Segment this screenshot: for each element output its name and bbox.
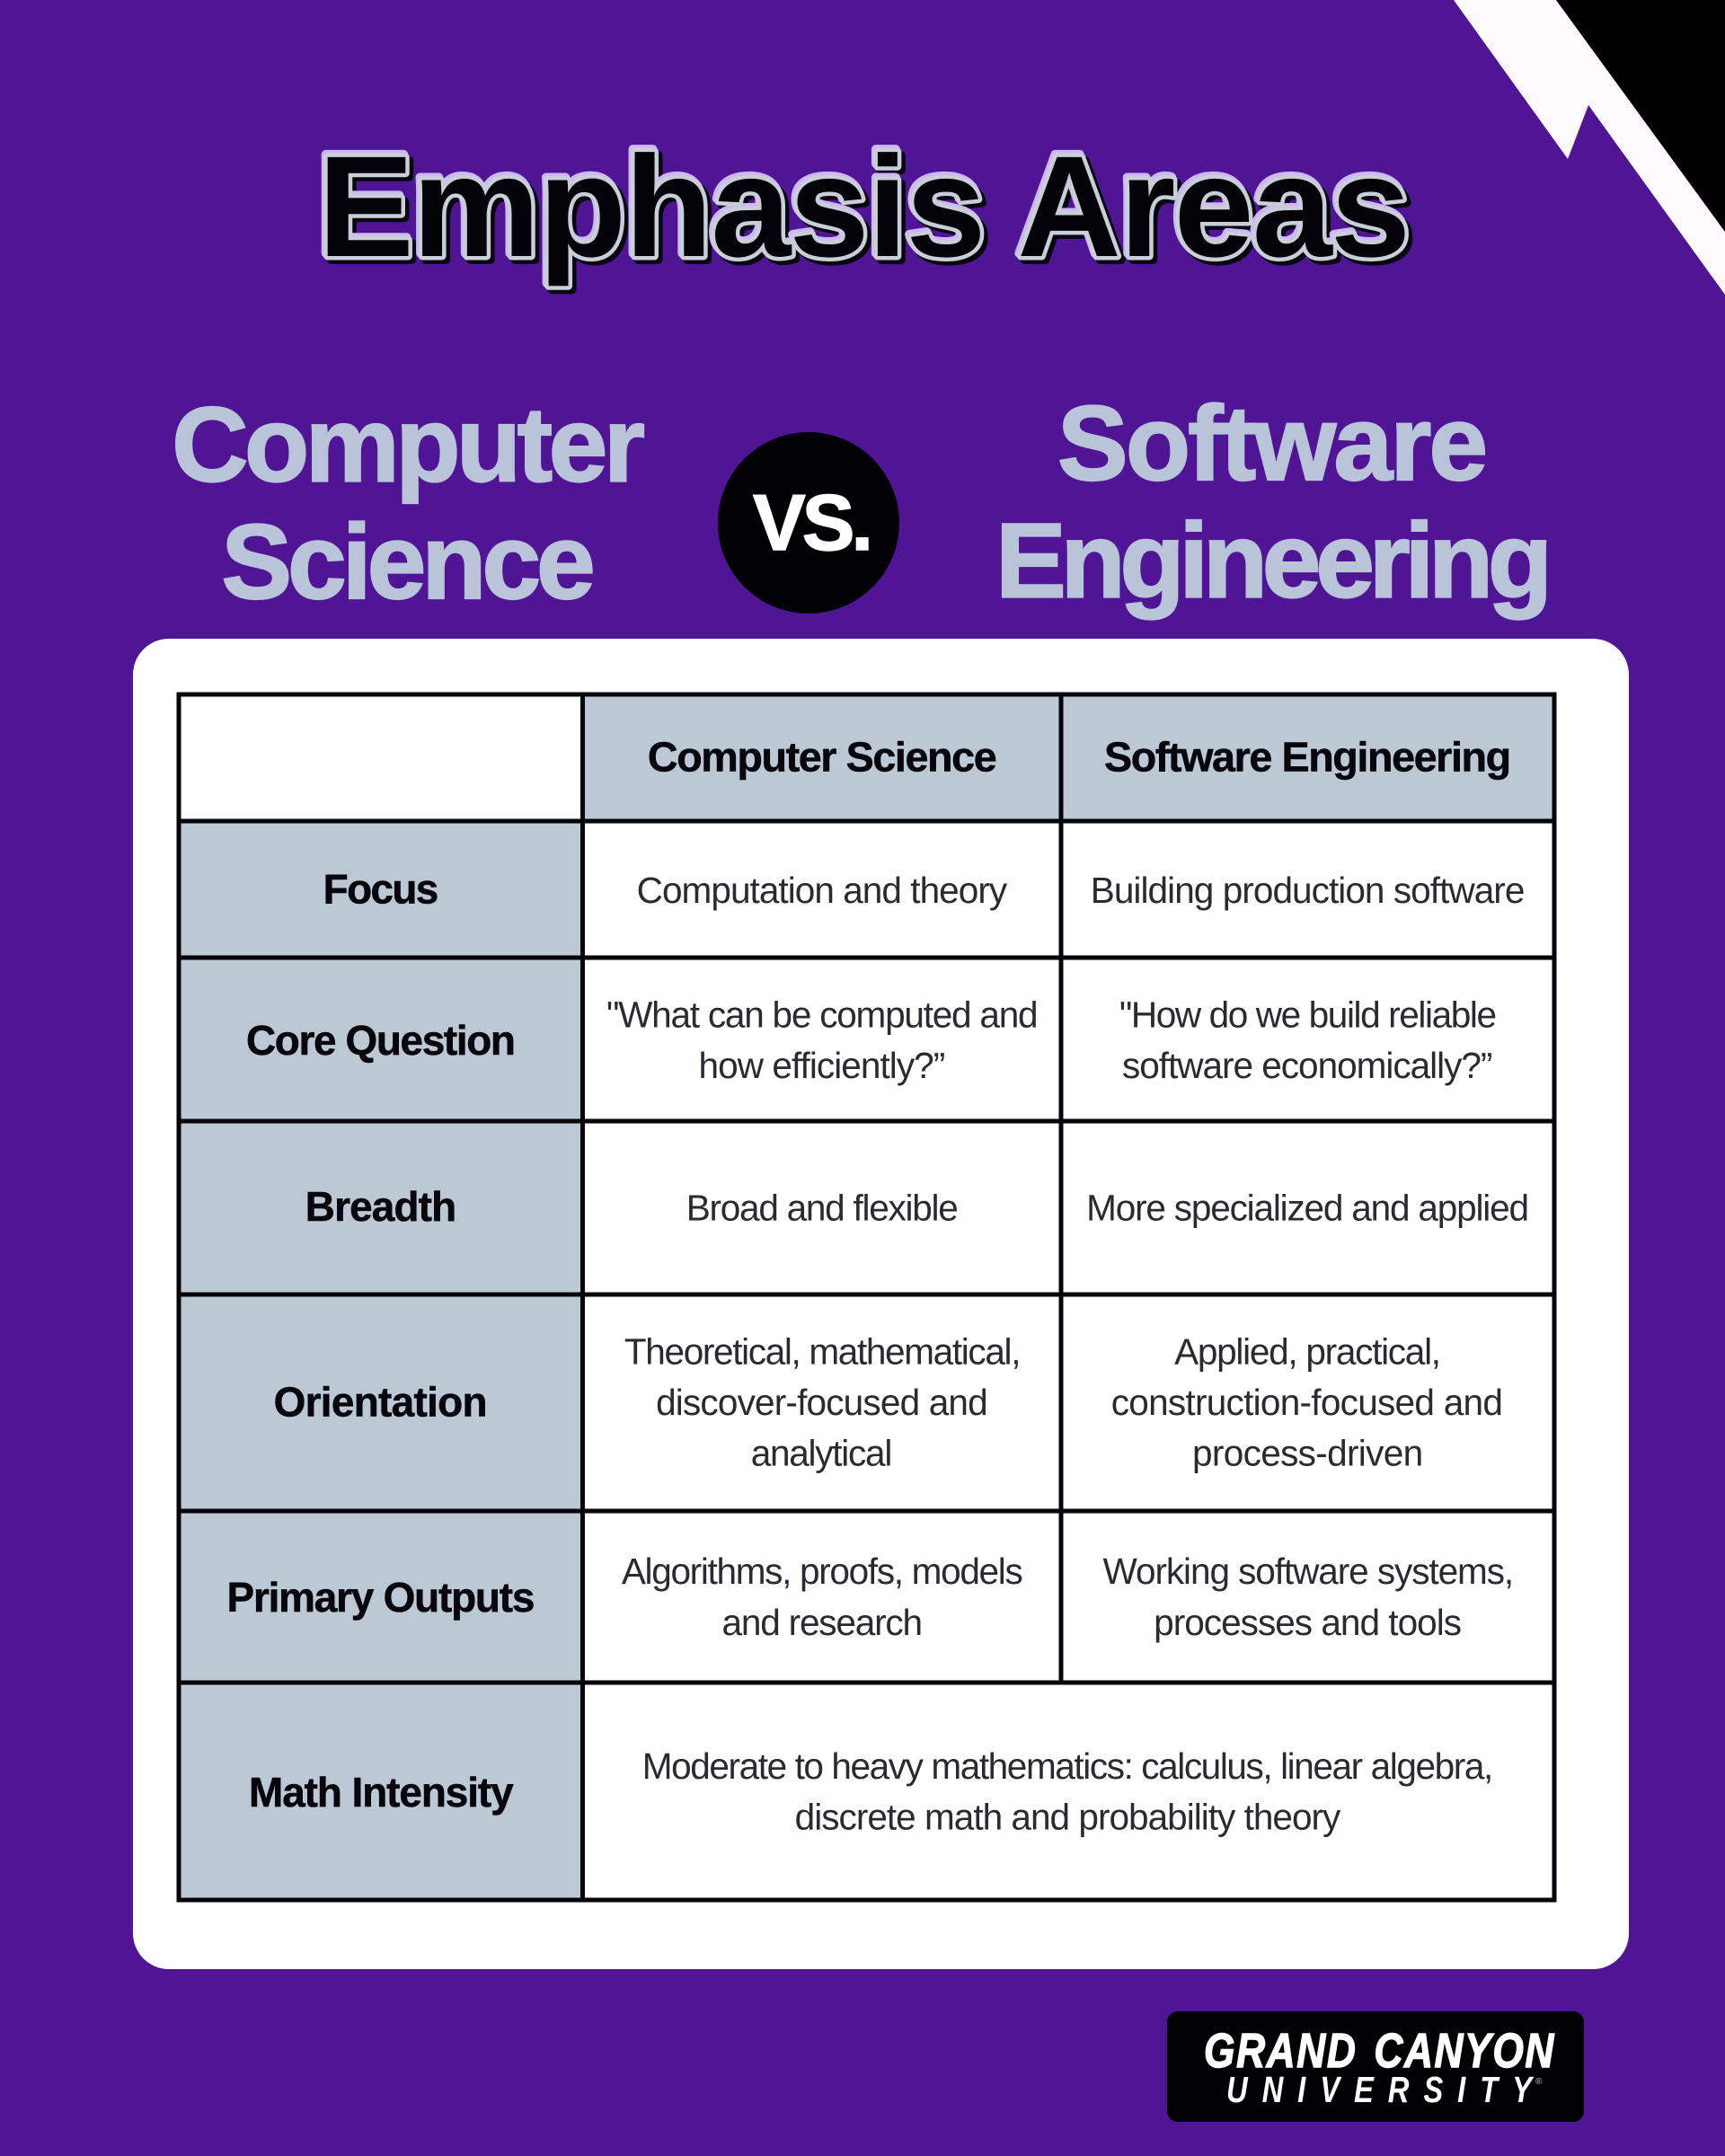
heading: Software Engineering: Software — [1057, 384, 1488, 502]
icon: VS badge: VS. — [753, 478, 873, 567]
row: Breadth — [305, 1183, 1529, 1230]
row: Orientation: construction-focused and — [1111, 1382, 1503, 1423]
column headers — [648, 734, 1511, 781]
row: Primary Outputs: Working software systems, — [1103, 1551, 1514, 1592]
title: Emphasis Areas — [316, 123, 1409, 284]
heading: Computer Science: Science — [221, 502, 596, 621]
column headers: Computer Science — [648, 734, 997, 781]
row: Math Intensity: discrete math and probability theory — [795, 1796, 1341, 1837]
row: Math Intensity: Math Intensity — [249, 1769, 514, 1816]
heading: Computer Science — [172, 385, 645, 621]
row: Core Question: software economically?” — [1122, 1045, 1492, 1086]
row: Breadth: More specialized and applied — [1086, 1187, 1529, 1228]
heading: Computer Science: Computer — [172, 385, 645, 504]
title: Emphasis Areas — [318, 126, 1411, 287]
row: Core Question: "What can be computed and — [606, 994, 1039, 1035]
row: Core Question: Core Question — [246, 1017, 516, 1064]
heading: Software Engineering: Engineering — [995, 500, 1552, 619]
row: Primary Outputs: Algorithms, proofs, models — [622, 1551, 1023, 1592]
table: comparison grid — [179, 694, 1554, 1900]
row: Primary Outputs: Primary Outputs — [227, 1574, 535, 1621]
logo: Grand Canyon University: UNIVERSITY — [1226, 2068, 1535, 2110]
row: Focus: Building production software — [1091, 870, 1525, 911]
column headers: Software Engineering — [1104, 734, 1511, 781]
row: Core Question: "How do we build reliable — [1119, 994, 1497, 1035]
row: Orientation: analytical — [751, 1433, 892, 1474]
row: Orientation: process-driven — [1192, 1433, 1423, 1474]
row: Primary Outputs: and research — [722, 1602, 923, 1643]
icon: VS badge — [718, 432, 899, 614]
row: Core Question: how efficiently?” — [699, 1045, 945, 1086]
row: Focus — [323, 866, 1525, 913]
icon: corner lightning accent — [1454, 0, 1725, 295]
row: Math Intensity — [249, 1745, 1493, 1837]
heading: Software Engineering — [995, 384, 1552, 619]
row: Orientation: Applied, practical, — [1174, 1330, 1441, 1372]
row: Orientation: discover-focused and — [656, 1382, 988, 1423]
row: Orientation — [274, 1330, 1503, 1474]
title: Emphasis Areas — [318, 126, 1411, 287]
logo: Grand Canyon University: GRAND CANYON — [1204, 2024, 1555, 2078]
row: Primary Outputs: processes and tools — [1154, 1602, 1462, 1643]
row: Breadth: Broad and flexible — [686, 1187, 959, 1228]
row: Focus: Focus — [323, 866, 438, 913]
row: Math Intensity: Moderate to heavy mathematics: calculus, linear algebra, — [642, 1745, 1493, 1787]
row: Orientation: Orientation — [274, 1379, 488, 1426]
row: Orientation: Theoretical, mathematical, — [624, 1330, 1021, 1372]
row: Primary Outputs — [227, 1551, 1514, 1643]
logo: Grand Canyon University — [1167, 2011, 1584, 2122]
row: Breadth: Breadth — [305, 1183, 456, 1230]
panel: comparison card — [133, 639, 1629, 1969]
row: Core Question — [246, 994, 1497, 1086]
row: Focus: Computation and theory — [637, 870, 1008, 911]
logo: Grand Canyon University: ® — [1535, 2077, 1543, 2087]
title: Emphasis Areas — [322, 129, 1414, 290]
